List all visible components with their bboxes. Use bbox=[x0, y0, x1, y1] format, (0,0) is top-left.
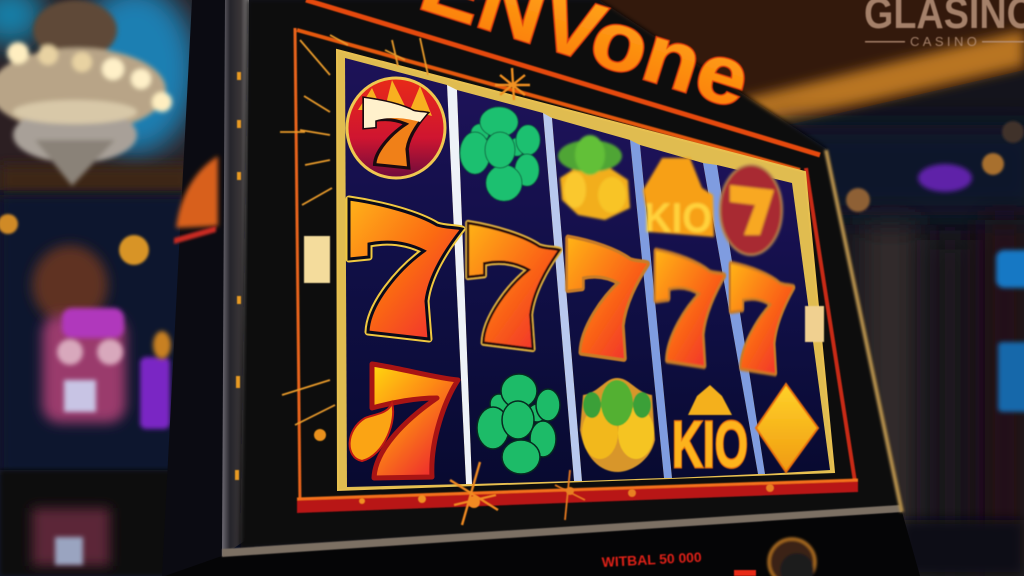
symbol: bottom left seven with lemon bbox=[350, 364, 458, 478]
watermark subtitle: CASINO bbox=[910, 34, 980, 49]
symbol: seven on sun disc bbox=[347, 78, 445, 178]
reel 2 bbox=[457, 90, 574, 484]
reel frame bbox=[337, 50, 834, 490]
symbol: bottom green cluster bbox=[477, 374, 560, 474]
divider 1 bbox=[447, 85, 472, 484]
sparks bbox=[280, 35, 774, 525]
machine front panel bbox=[240, 0, 902, 548]
background: left lights and distant machines bbox=[0, 214, 171, 566]
machine cabinet side bbox=[162, 0, 249, 576]
symbol: top bar label, reel 4 bbox=[643, 158, 714, 241]
symbol: big seven row, reel 4 bbox=[656, 251, 724, 366]
symbol: big seven row, reel 3 bbox=[568, 238, 647, 358]
symbol: bottom fruit, reel 3 bbox=[580, 378, 655, 472]
symbol: top bar label, reel 4: KIO bbox=[644, 194, 712, 241]
reel 4 bbox=[640, 145, 758, 478]
background: left casino interior bbox=[0, 0, 240, 576]
symbol: big seven row, reel 5 bbox=[731, 264, 793, 373]
background: right casino interior bbox=[600, 0, 1024, 576]
red indicator bbox=[734, 570, 756, 576]
machine readout text: WITBAL 50 000 bbox=[601, 550, 702, 570]
divider 3 bbox=[630, 140, 672, 478]
knob bbox=[767, 537, 817, 576]
chandelier bbox=[0, 0, 172, 186]
symbol: big seven row, reel 1 bbox=[349, 199, 462, 339]
symbol: top seven disc, reel 5 bbox=[720, 165, 782, 255]
divider 2 bbox=[543, 113, 582, 481]
symbol: bottom bar label, reel 4: KIO bbox=[672, 407, 748, 481]
neon outer frame bbox=[295, 0, 858, 513]
divider 4 bbox=[703, 163, 765, 474]
symbol: top fruit, reel 3 bbox=[558, 135, 630, 220]
watermark logo bbox=[864, 0, 1024, 49]
symbol: big seven row, reel 2 bbox=[468, 223, 560, 349]
symbol: top green cluster bbox=[460, 107, 540, 201]
symbol: diamond bbox=[756, 384, 818, 472]
reel 3 bbox=[552, 118, 664, 481]
reel 5 bbox=[717, 165, 830, 474]
reel 1 bbox=[345, 58, 466, 487]
symbol: bottom bar label, reel 4 bbox=[672, 385, 748, 481]
cabinet indicator lights bbox=[235, 72, 241, 480]
light bars beside reels bbox=[304, 236, 824, 342]
machine bottom and base bbox=[165, 150, 920, 576]
